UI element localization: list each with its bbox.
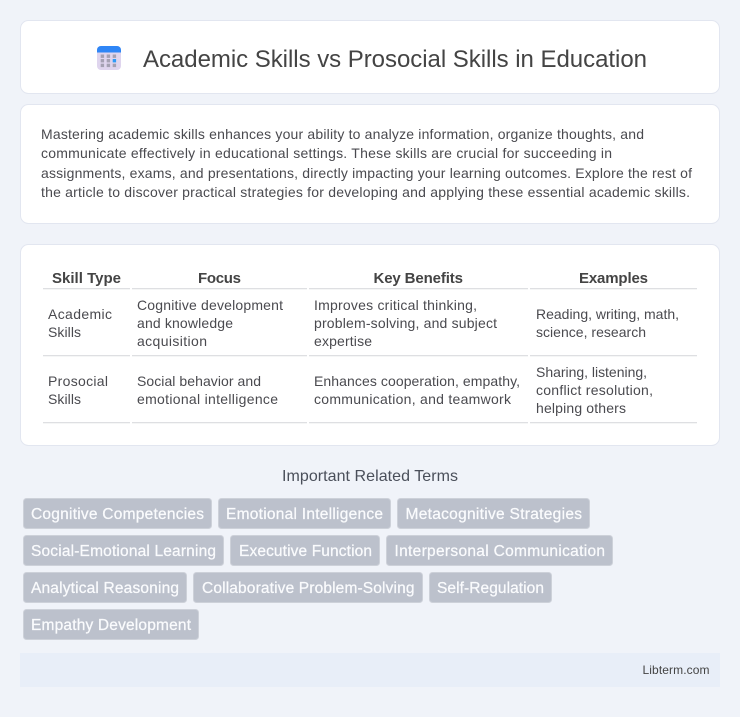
table header row: Key Benefits xyxy=(374,270,463,287)
intro text: assignments, exams, and presentations, directly impacting your learning outcomes. Explore the rest of xyxy=(41,165,692,181)
tags: related terms xyxy=(24,498,612,640)
tag: Executive Function xyxy=(230,536,380,566)
intro text: Mastering academic skills enhances your ability to analyze information, organize thoughts, and xyxy=(41,126,644,142)
table row: academic skills: Skills xyxy=(48,324,81,340)
panel: introduction xyxy=(20,104,720,224)
table row: academic skills: and knowledge xyxy=(137,315,233,331)
title: Academic Skills vs Prosocial Skills in Education xyxy=(143,46,647,73)
table row: prosocial skills xyxy=(48,364,653,416)
tag: Collaborative Problem-Solving xyxy=(194,572,422,602)
table row: prosocial skills: helping others xyxy=(536,400,626,416)
table rules xyxy=(43,288,697,423)
table row: academic skills: science, research xyxy=(536,324,646,340)
table row: prosocial skills: Prosocial xyxy=(48,373,108,389)
table row: academic skills: acquisition xyxy=(137,333,207,349)
heading: important related terms: Important Related Terms xyxy=(282,468,458,485)
panel: comparison table xyxy=(20,244,720,446)
intro text: communicate effectively in educational settings. These skills are crucial for succeeding in xyxy=(41,145,612,161)
intro text xyxy=(41,126,692,200)
tag: Emotional Intelligence: Emotional Intelligence xyxy=(226,506,383,523)
table row: prosocial skills: emotional intelligence xyxy=(137,391,278,407)
table row: academic skills: problem-solving, and subject xyxy=(314,315,497,331)
table row: academic skills: Academic xyxy=(48,306,112,322)
table header row: Skill Type xyxy=(52,270,121,287)
table row: academic skills: Improves critical thinking, xyxy=(314,297,477,313)
table row: academic skills: Reading, writing, math, xyxy=(536,306,679,322)
tag: Interpersonal Communication xyxy=(386,536,612,566)
tag: Social-Emotional Learning xyxy=(24,536,224,566)
tag: Metacognitive Strategies xyxy=(398,498,590,528)
tag: Cognitive Competencies: Cognitive Competencies xyxy=(31,506,204,523)
footer xyxy=(20,653,720,687)
intro text: the article to discover practical strategies for developing and applying these essential academic skills. xyxy=(41,184,690,200)
tag: Collaborative Problem-Solving: Collaborative Problem-Solving xyxy=(202,580,414,597)
table row: academic skills: expertise xyxy=(314,333,372,349)
tag: Emotional Intelligence xyxy=(218,498,390,528)
panel: header xyxy=(20,20,720,94)
table row: academic skills xyxy=(48,297,679,349)
tag: Empathy Development xyxy=(24,610,198,640)
tag: Metacognitive Strategies: Metacognitive Strategies xyxy=(406,506,582,523)
table header row xyxy=(52,270,648,287)
table header row: Focus xyxy=(198,270,241,287)
tag: Analytical Reasoning: Analytical Reasoning xyxy=(31,580,179,597)
tag: Social-Emotional Learning: Social-Emotional Learning xyxy=(31,543,216,560)
tag: Analytical Reasoning xyxy=(24,572,186,602)
table row: prosocial skills: Skills xyxy=(48,391,81,407)
table row: academic skills: Cognitive development xyxy=(137,297,283,313)
table row: prosocial skills: Social behavior and xyxy=(137,373,261,389)
icon: calendar xyxy=(97,46,121,70)
tag: Interpersonal Communication: Interpersonal Communication xyxy=(394,543,605,560)
tag: Executive Function: Executive Function xyxy=(239,543,372,560)
tag: Cognitive Competencies xyxy=(24,498,212,528)
table row: prosocial skills: conflict resolution, xyxy=(536,382,653,398)
table row: prosocial skills: communication, and teamwork xyxy=(314,391,512,407)
tag: Empathy Development: Empathy Development xyxy=(31,617,192,634)
tag: Self-Regulation: Self-Regulation xyxy=(437,580,544,597)
table header row: Examples xyxy=(579,270,648,287)
footer credit: Libterm.com xyxy=(642,663,710,677)
tag: Self-Regulation xyxy=(430,572,552,602)
table row: prosocial skills: Sharing, listening, xyxy=(536,364,647,380)
table row: prosocial skills: Enhances cooperation, empathy, xyxy=(314,373,520,389)
